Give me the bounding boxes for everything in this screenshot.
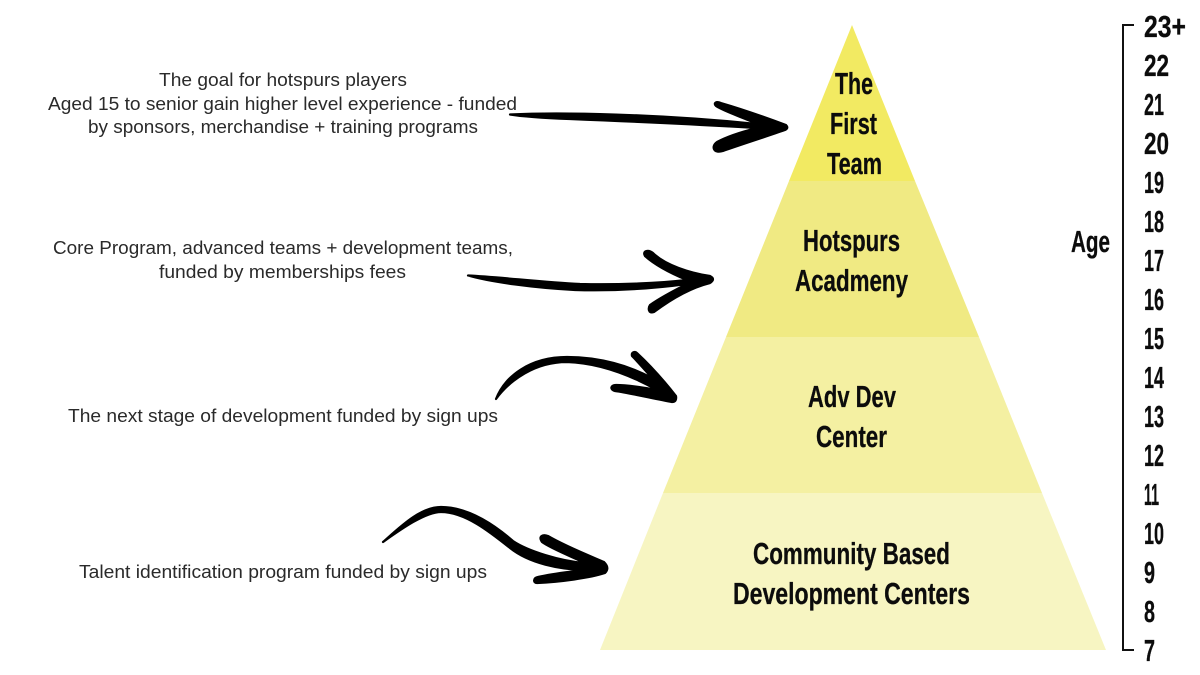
age scale: 8: [1144, 594, 1155, 629]
pyramid: [600, 25, 1106, 650]
age scale: 15: [1144, 321, 1164, 356]
pyramid tier: Hotspurs Academy: [726, 181, 979, 337]
text: academy description: Core Program, advanced teams + development teams,: [53, 237, 513, 258]
pyramid tier: Hotspurs Academy: Hotspurs: [803, 223, 900, 258]
pyramid tier: The First Team: [789, 25, 915, 181]
pyramid tier: Adv Dev Center: Adv Dev: [808, 379, 897, 414]
text: first team description: The goal for hotspurs players: [159, 69, 407, 90]
pyramid tier: Community Based Development Centers: Community Based: [753, 536, 950, 571]
text: first team description: [48, 69, 517, 137]
age label: Age: [1071, 224, 1110, 259]
age scale: 13: [1144, 399, 1164, 434]
age scale: 12: [1144, 438, 1164, 473]
age scale: 10: [1144, 516, 1164, 551]
age scale: 21: [1144, 87, 1164, 122]
age scale: 16: [1144, 282, 1164, 317]
text: first team description: by sponsors, merchandise + training programs: [88, 116, 478, 137]
text: first team description: Aged 15 to senior gain higher level experience - funded: [48, 93, 517, 114]
pyramid tier: Adv Dev Center: [663, 337, 1042, 493]
arrow: to academy: [468, 251, 713, 312]
age scale: 14: [1144, 360, 1164, 395]
age scale: 7: [1144, 633, 1155, 668]
age scale: 20: [1144, 126, 1169, 161]
pyramid tier: The First Team: Team: [827, 146, 882, 181]
text: academy description: funded by memberships fees: [159, 261, 406, 282]
arrow: to first team: [510, 102, 787, 152]
pyramid tier: The First Team: First: [830, 106, 877, 141]
pyramid tier: Hotspurs Academy: Acadmeny: [795, 263, 909, 298]
age scale: 18: [1144, 204, 1164, 239]
pyramid tier: Adv Dev Center: Center: [816, 419, 887, 454]
pyramid tier: The First Team: The: [835, 66, 873, 101]
age scale: 17: [1144, 243, 1164, 278]
text: community description: Talent identification program funded by sign ups: [79, 561, 487, 582]
age scale: 9: [1144, 555, 1155, 590]
age scale: [1144, 9, 1186, 668]
age scale: 19: [1144, 165, 1164, 200]
arrow: to adv dev center: [496, 352, 676, 402]
age bracket: [1123, 25, 1134, 650]
age scale: 22: [1144, 48, 1169, 83]
pyramid tier: Community Based Development Centers: Development Centers: [733, 576, 970, 611]
age scale: 23+: [1144, 9, 1186, 44]
pyramid tier: Community Based Development Centers: [600, 493, 1106, 650]
age scale: 11: [1144, 477, 1159, 512]
text: adv dev description: The next stage of development funded by sign ups: [68, 405, 498, 426]
arrow: to community centers: [383, 507, 607, 583]
text: academy description: [53, 237, 513, 282]
